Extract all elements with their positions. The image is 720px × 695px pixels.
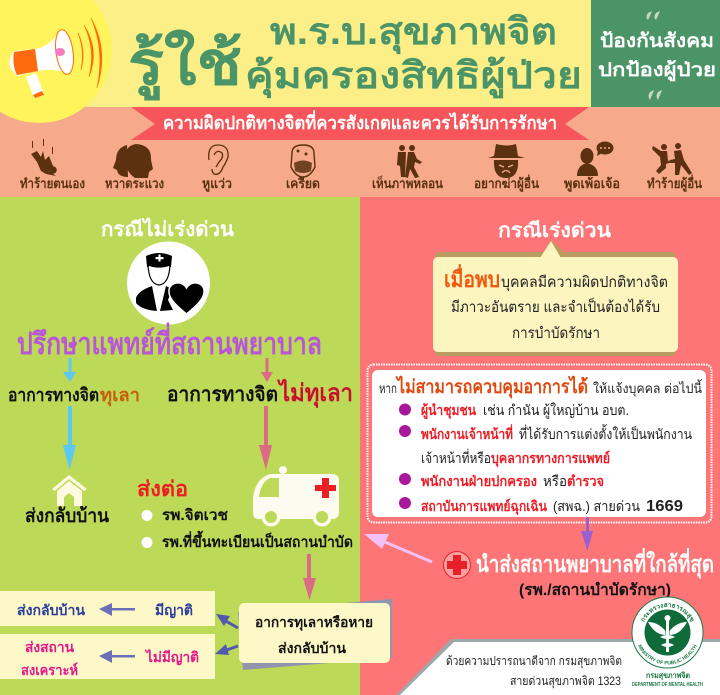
label: wants to kill others: อยากฆ่าผู้อื่น bbox=[474, 174, 539, 192]
arrow: blue short bbox=[63, 358, 76, 382]
item: administrative officers: ตำรวจ bbox=[567, 473, 604, 489]
icon: megaphone bbox=[9, 18, 102, 98]
label: symptoms improved: ทุเลา bbox=[100, 385, 140, 407]
label: send home: ส่งกลับบ้าน bbox=[25, 505, 109, 527]
arrow: light pink to ambulance bbox=[364, 534, 432, 562]
panel: non-urgent background bbox=[0, 197, 360, 695]
ribbon heading: ความผิดปกติทางจิตที่ควรสังเกตและควรได้รับการรักษา bbox=[163, 110, 557, 133]
label: symptoms improved: อาการทางจิต bbox=[8, 385, 99, 405]
panel: slogan: ปกป้องผู้ป่วย bbox=[598, 59, 716, 82]
arrow: pink to outcome box bbox=[303, 554, 316, 600]
box: improved or recovered: อาการทุเลาหรือหาย bbox=[255, 614, 373, 631]
callout: when found: มีภาวะอันตราย และจำเป็นต้องได้รับ bbox=[451, 297, 660, 316]
logo: ministry of public health: กระทรวงสาธารณสุข bbox=[641, 602, 694, 622]
title: line 1: พ.ร.บ.สุขภาพจิต bbox=[270, 11, 557, 55]
label: symptoms not improved bbox=[167, 378, 353, 409]
ribbon heading bbox=[131, 107, 589, 140]
box: improved or recovered bbox=[238, 599, 392, 670]
item: officials: พนักงานเจ้าหน้าที่ bbox=[421, 424, 513, 442]
box: no relatives bbox=[0, 634, 215, 679]
text: department name english: DEPARTMENT OF MENTAL HEALTH bbox=[632, 682, 703, 688]
item: administrative officers bbox=[399, 473, 604, 489]
title: line 2: คุ้มครองสิทธิผู้ป่วย bbox=[245, 55, 582, 99]
item: emergency institute: 1669 bbox=[646, 498, 683, 515]
logo: ministry of public health bbox=[632, 596, 704, 668]
footer panel bbox=[396, 639, 720, 695]
heading: urgent: กรณีเร่งด่วน bbox=[498, 219, 611, 242]
callout: when found: การบำบัดรักษา bbox=[512, 325, 600, 342]
icon: house bbox=[52, 475, 87, 506]
text: department name thai: กรมสุขภาพจิต bbox=[646, 671, 690, 681]
arrow: pink short bbox=[261, 358, 273, 382]
icon: self harm bbox=[31, 139, 57, 176]
item: emergency institute bbox=[399, 497, 683, 515]
arrow: purple to hospital bbox=[581, 517, 593, 551]
box: no relatives: สงเคราะห์ bbox=[21, 662, 78, 678]
icon: man with hat bbox=[488, 144, 525, 178]
icon: doctor and heart bbox=[127, 242, 210, 324]
heading: consult doctor: ปรึกษาแพทย์ที่สถานพยาบาล bbox=[17, 322, 322, 361]
header background bbox=[0, 0, 720, 107]
arrow: to has relatives bbox=[216, 614, 238, 628]
item: emergency institute: (สพฉ.) สายด่วน bbox=[553, 498, 640, 514]
label: self harm: ทำร้ายตนเอง bbox=[20, 176, 85, 191]
box: has relatives: มีญาติ bbox=[155, 602, 193, 619]
title: main word: รู้ใช้ bbox=[128, 29, 242, 101]
icon: ear bbox=[209, 145, 228, 174]
bullet: psychiatric hospital: รพ.จิตเวช bbox=[162, 506, 228, 524]
icon: hallucination walkers bbox=[397, 145, 422, 178]
box: has relatives: ส่งกลับบ้าน bbox=[17, 602, 85, 618]
heading: refer: ส่งต่อ bbox=[137, 478, 188, 501]
item: officials: บุคลากรทางการแพทย์ bbox=[491, 450, 610, 467]
arrow: to no relatives bbox=[215, 644, 238, 655]
panel: contact list bbox=[368, 364, 712, 522]
callout: when found: เมื่อพบ bbox=[444, 263, 500, 292]
item: administrative officers: พนักงานฝ่ายปกครอง bbox=[421, 473, 537, 489]
panel: slogan: ป้องกันสังคม bbox=[600, 30, 714, 52]
label: incoherent speech: พูดเพ้อเจ้อ bbox=[564, 176, 620, 192]
footer text: ด้วยความปรารถนาดีจาก กรมสุขภาพจิต bbox=[446, 654, 622, 669]
icon: speaker with bubble bbox=[577, 142, 614, 176]
item: officials: เจ้าหน้าที่หรือ bbox=[421, 449, 491, 466]
label: paranoia: หวาดระแวง bbox=[105, 176, 164, 191]
item: community leader: ผู้นำชุมชน bbox=[421, 402, 476, 419]
icon: red cross circle bbox=[444, 552, 470, 578]
label: hearing voices: หูแว่ว bbox=[202, 176, 232, 192]
bullet: registered facility: รพ.ที่ขึ้นทะเบียนเป็นสถานบำบัด bbox=[162, 530, 353, 551]
yellow circle bbox=[0, 0, 112, 123]
callout: when found bbox=[433, 240, 678, 356]
box: has relatives bbox=[0, 591, 215, 626]
callout: when found: บุคคลมีความผิดปกติทางจิต bbox=[501, 274, 668, 292]
arrow: blue long bbox=[63, 406, 76, 470]
item: officials: ที่ได้รับการแต่งตั้งให้เป็นพนักงาน bbox=[519, 424, 692, 442]
bullet: registered facility bbox=[142, 530, 353, 551]
label: hallucinations: เห็นภาพหลอน bbox=[372, 174, 443, 191]
item: administrative officers: หรือ bbox=[543, 473, 567, 489]
heading: non-urgent: กรณีไม่เร่งด่วน bbox=[101, 217, 234, 241]
label: symptoms not improved: อาการทางจิต bbox=[167, 384, 278, 406]
item: officials bbox=[399, 424, 692, 467]
item: emergency institute: สถาบันการแพทย์ฉุกเฉิน bbox=[421, 498, 547, 515]
box: no relatives: ไม่มีญาติ bbox=[144, 648, 199, 666]
text: hospital or treatment facility: (รพ./สถานบำบัดรักษา) bbox=[519, 581, 671, 599]
icon: stressed face bbox=[291, 145, 315, 177]
symptoms band background bbox=[0, 107, 720, 198]
panel: urgent background bbox=[360, 197, 720, 695]
logo: ministry of public health: MINISTRY OF PUBLIC HEALTH bbox=[638, 644, 697, 664]
icon: ambulance bbox=[253, 466, 339, 526]
label: harms others: ทำร้ายผู้อื่น bbox=[647, 174, 702, 192]
icon: paranoia bbox=[113, 144, 153, 178]
label: stress: เครียด bbox=[286, 176, 320, 191]
footer text bbox=[446, 654, 622, 689]
contact list heading bbox=[379, 375, 702, 399]
arrow: pink long bbox=[259, 406, 272, 470]
footer text: สายด่วนสุขภาพจิต 1323 bbox=[510, 674, 621, 689]
contact list heading: ไม่สามารถควบคุมอาการได้ bbox=[395, 375, 588, 399]
icon: fight bbox=[652, 143, 692, 175]
box: no relatives: ส่งสถาน bbox=[25, 639, 74, 655]
panel: slogan bbox=[591, 0, 720, 107]
contact list heading: หาก bbox=[379, 381, 397, 396]
contact list heading: ให้แจ้งบุคคล ต่อไปนี้ bbox=[593, 379, 702, 397]
item: community leader: เช่น กำนัน ผู้ใหญ่บ้าน อบต. bbox=[483, 402, 629, 419]
label: symptoms not improved: ไม่ทุเลา bbox=[276, 378, 353, 409]
item: community leader bbox=[399, 402, 629, 419]
box: improved or recovered: ส่งกลับบ้าน bbox=[278, 640, 346, 656]
